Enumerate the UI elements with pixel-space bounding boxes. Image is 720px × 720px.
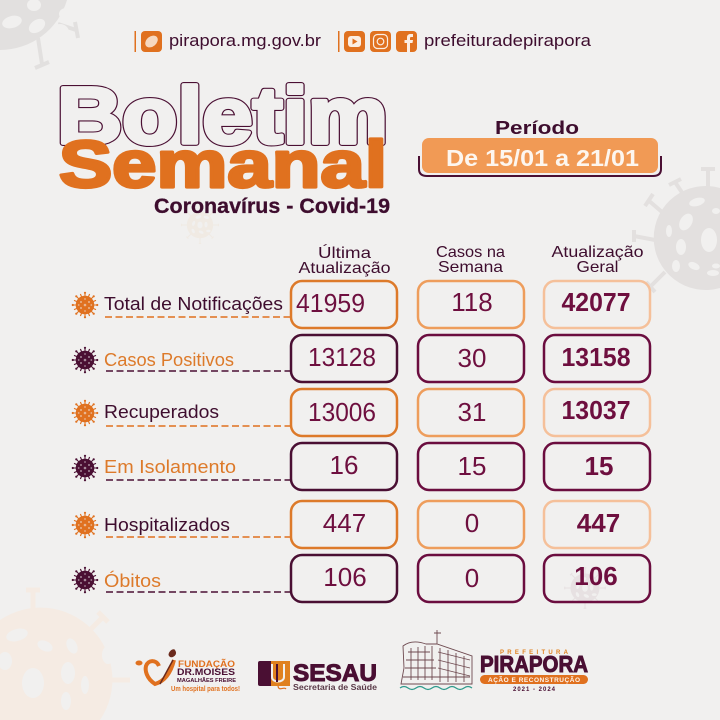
label: Óbitos bbox=[104, 570, 161, 591]
logo: SESAU: SESAU bbox=[293, 660, 377, 687]
value box: week bbox=[418, 389, 524, 436]
period heading: Período bbox=[495, 118, 579, 138]
title word: Semanal: Semanal bbox=[59, 127, 387, 201]
value box: last update bbox=[291, 443, 397, 490]
value box: general: 15 bbox=[585, 451, 613, 481]
value box: week: 0 bbox=[465, 508, 479, 538]
value box: general bbox=[544, 443, 650, 490]
label: Casos Positivos bbox=[104, 349, 234, 370]
logo: Fundação Dr. Moisés bbox=[136, 650, 240, 693]
logo: Fundação Dr. Moisés: MAGALHÃES FREIRE bbox=[177, 677, 236, 684]
value box: week: 15 bbox=[458, 451, 486, 481]
value box: last update bbox=[291, 335, 397, 382]
header: Atualização Geral: Geral bbox=[576, 259, 618, 276]
icon: website bbox=[141, 31, 162, 52]
background virus: bottom left bbox=[0, 590, 130, 720]
icon: dark virus bbox=[72, 567, 98, 593]
value box: week: 31 bbox=[458, 397, 486, 427]
value box: week bbox=[418, 281, 524, 328]
header: Última Atualização: Atualização bbox=[298, 260, 391, 277]
value box: general: 447 bbox=[577, 508, 620, 538]
value box: week bbox=[418, 555, 524, 602]
value box: week: 0 bbox=[465, 563, 479, 593]
row: Recuperados bbox=[72, 389, 650, 436]
background virus: right bbox=[634, 169, 720, 292]
logo: Prefeitura Pirapora: PIRAPORA bbox=[480, 651, 588, 677]
background virus: faint centre bbox=[182, 207, 218, 243]
logo: Prefeitura Pirapora: 2021 - 2024 bbox=[513, 687, 556, 693]
label: Hospitalizados bbox=[104, 514, 230, 535]
column headers bbox=[298, 243, 644, 277]
value box: last update bbox=[291, 501, 397, 548]
value box: last update: 106 bbox=[323, 562, 367, 592]
period callout bbox=[419, 118, 661, 176]
value box: week bbox=[418, 443, 524, 490]
logo: Prefeitura Pirapora: AÇÃO E RECONSTRUÇÃO bbox=[488, 675, 580, 684]
logo: Prefeitura Pirapora bbox=[480, 650, 588, 693]
logo: Pirapora building drawing bbox=[400, 630, 472, 690]
value box: last update: 41959 bbox=[296, 288, 365, 318]
value box: week bbox=[418, 335, 524, 382]
logo: SESAU bbox=[258, 660, 378, 692]
icon: facebook bbox=[396, 31, 417, 52]
value box: general bbox=[544, 555, 650, 602]
value box: last update bbox=[291, 389, 397, 436]
row: Em Isolamento bbox=[72, 443, 650, 490]
row: Óbitos bbox=[72, 555, 650, 602]
logo: SESAU: Secretaria de Saúde bbox=[293, 683, 378, 692]
value box: last update: 447 bbox=[323, 508, 366, 538]
title bbox=[57, 71, 390, 218]
value box: last update bbox=[291, 281, 397, 328]
row: Total de Notificações bbox=[72, 281, 650, 328]
value box: general: 13158 bbox=[562, 342, 630, 372]
value box: week bbox=[418, 501, 524, 548]
icon: orange virus bbox=[72, 400, 98, 426]
header: Atualização Geral: Atualização bbox=[552, 244, 644, 261]
logo: Prefeitura Pirapora: PREFEITURA bbox=[500, 650, 569, 656]
icon: dark virus bbox=[72, 455, 98, 481]
icon: dark virus bbox=[72, 347, 98, 373]
label: Total de Notificações bbox=[104, 293, 283, 314]
header: Casos na Semana: Casos na bbox=[436, 244, 505, 261]
header: Última Atualização: Última bbox=[318, 243, 371, 262]
title word: Boletim: Boletim bbox=[57, 71, 388, 160]
row: Hospitalizados bbox=[72, 501, 650, 548]
icon: orange virus bbox=[72, 292, 98, 318]
subtitle: Coronavírus - Covid-19 bbox=[154, 195, 390, 218]
value box: last update: 13006 bbox=[308, 397, 376, 427]
logo: Fundação Dr. Moisés: Um hospital para todos! bbox=[171, 686, 240, 693]
icon: orange virus bbox=[72, 512, 98, 538]
background virus: top left bbox=[0, 0, 78, 68]
row: Casos Positivos bbox=[72, 335, 650, 382]
value box: week: 118 bbox=[451, 287, 493, 317]
value box: general bbox=[544, 281, 650, 328]
header: social media bbox=[338, 31, 592, 52]
label: Recuperados bbox=[104, 401, 219, 422]
background virus: faint lower right bbox=[565, 568, 605, 608]
value box: general bbox=[544, 389, 650, 436]
logo: Fundação Dr. Moisés: FUNDAÇÃO bbox=[178, 659, 235, 669]
value box: last update: 13128 bbox=[308, 342, 376, 372]
value box: general: 13037 bbox=[562, 395, 630, 425]
value box: last update: 16 bbox=[330, 450, 358, 480]
header: Casos na Semana: Semana bbox=[438, 259, 503, 276]
website address: pirapora.mg.gov.br bbox=[169, 31, 321, 50]
value box: general: 106 bbox=[574, 561, 618, 591]
period dates: De 15/01 a 21/01 bbox=[446, 145, 639, 171]
value box: general: 42077 bbox=[562, 287, 630, 317]
logo: Fundação Dr. Moisés: DR.MOISES bbox=[177, 667, 235, 677]
value box: week: 30 bbox=[458, 343, 486, 373]
title word: Boletim: Boletim bbox=[57, 71, 388, 160]
social handle: prefeituradepirapora bbox=[424, 31, 592, 50]
header: website bbox=[134, 31, 321, 52]
value box: general bbox=[544, 335, 650, 382]
value box: general bbox=[544, 501, 650, 548]
value box: last update bbox=[291, 555, 397, 602]
icon: instagram bbox=[370, 31, 391, 52]
label: Em Isolamento bbox=[104, 456, 236, 477]
icon: youtube bbox=[344, 31, 365, 52]
